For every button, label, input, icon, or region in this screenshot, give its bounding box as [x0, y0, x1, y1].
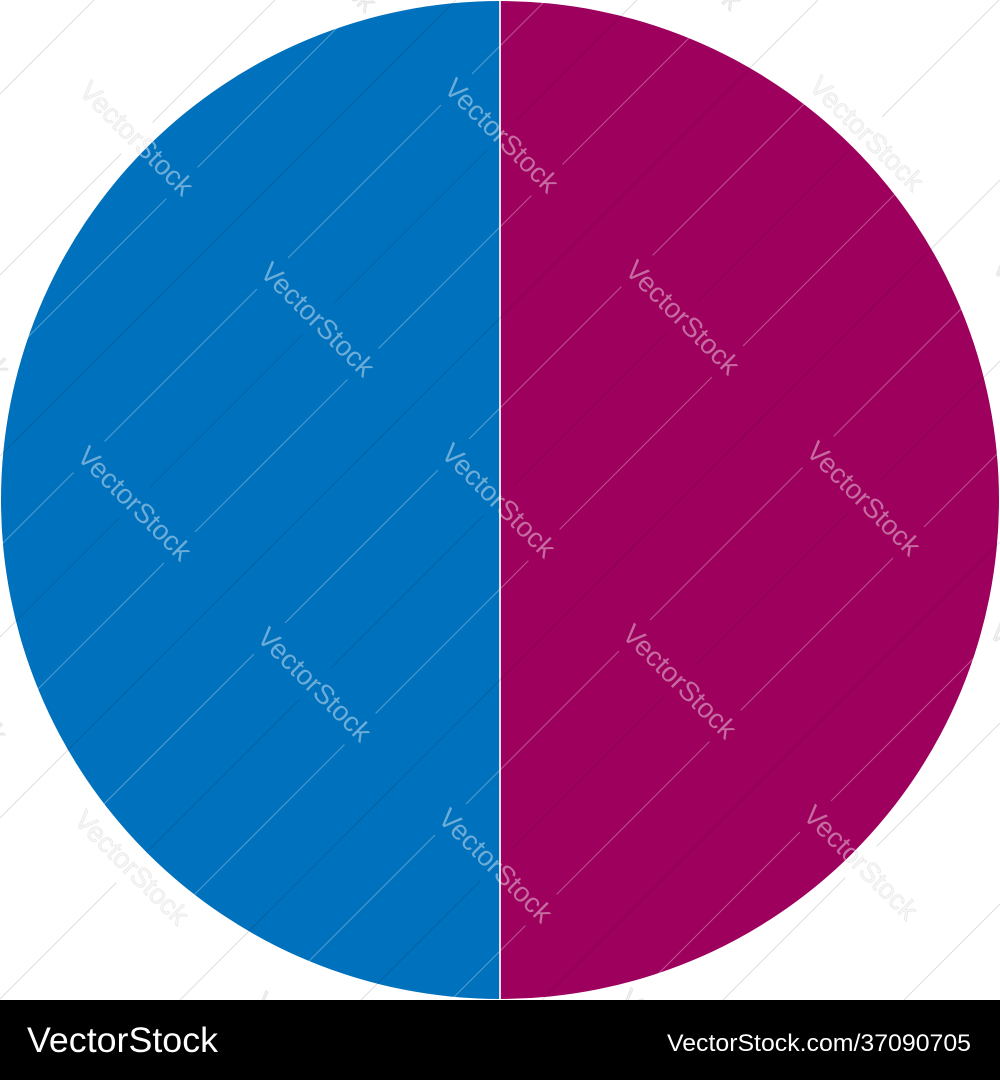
- footer image reference: VectorStock.com/37090705: [667, 1030, 971, 1057]
- watermark text over pie: VectorStock: [254, 256, 381, 383]
- watermark text on white background: VectorStock: [803, 70, 930, 197]
- watermark text over pie: VectorStock: [438, 72, 565, 199]
- watermark text over pie: VectorStock: [616, 618, 743, 745]
- watermark text over pie: VectorStock: [619, 254, 746, 381]
- left half: blue slice: [1, 1, 500, 999]
- watermark text over pie: VectorStock: [800, 435, 927, 562]
- watermark text over pie: VectorStock: [435, 437, 562, 564]
- footer brand name: VectorStock: [27, 1021, 219, 1060]
- watermark text over pie: VectorStock: [432, 802, 559, 929]
- watermark text on white background: VectorStock: [800, 435, 927, 562]
- slice divider: [499, 1, 501, 999]
- watermark text over pie: VectorStock: [251, 621, 378, 748]
- watermark text on white background: VectorStock: [73, 75, 200, 202]
- watermark text over pie: VectorStock: [68, 804, 195, 931]
- watermark text on white background: VectorStock: [797, 799, 924, 926]
- watermark text over pie: [68, 70, 930, 931]
- watermark text over pie: VectorStock: [797, 799, 924, 926]
- watermark text on white background: VectorStock: [68, 804, 195, 931]
- watermark text over pie: VectorStock: [73, 75, 200, 202]
- right half: magenta slice: [500, 1, 999, 999]
- watermark text over pie: VectorStock: [71, 440, 198, 567]
- watermark text on white background: VectorStock: [71, 440, 198, 567]
- watermark text over pie: VectorStock: [803, 70, 930, 197]
- footer bar: [0, 1000, 1000, 1080]
